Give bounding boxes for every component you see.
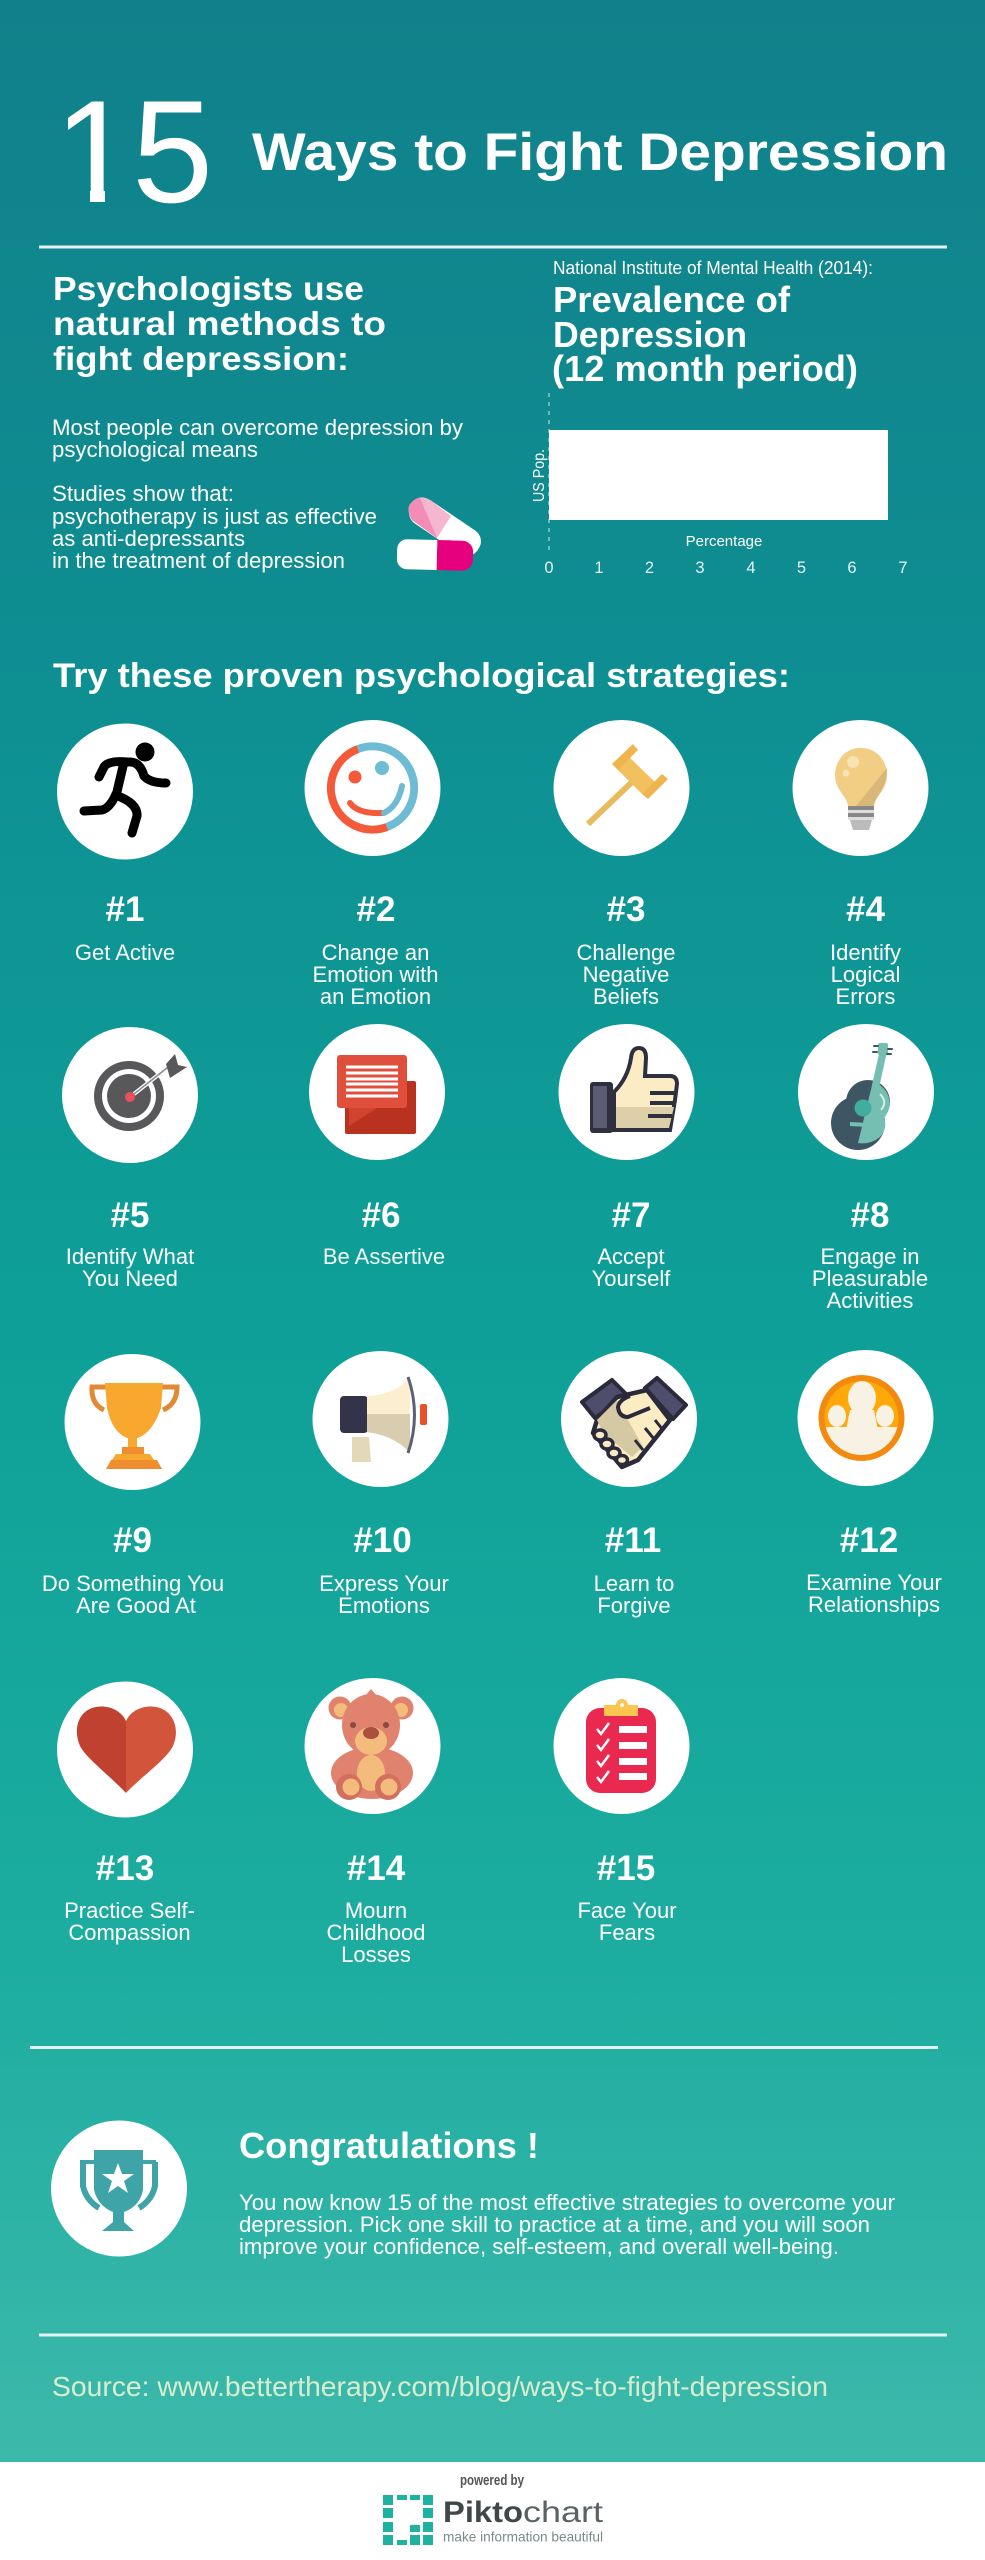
label: Identify bbox=[830, 940, 901, 965]
label: Relationships bbox=[808, 1592, 940, 1617]
wordmark: Pikto bbox=[443, 2496, 523, 2529]
number: #6 bbox=[362, 1196, 400, 1235]
chart heading bbox=[552, 279, 858, 389]
number: #15 bbox=[597, 1849, 655, 1888]
label: Identify What bbox=[66, 1244, 194, 1269]
intro text: psychological means bbox=[52, 437, 258, 462]
wordmark bbox=[443, 2496, 604, 2544]
bar chart: 4 bbox=[746, 559, 756, 577]
chart heading: (12 month period) bbox=[552, 348, 858, 389]
label bbox=[577, 1898, 677, 1945]
intro text: psychotherapy is just as effective bbox=[52, 504, 377, 529]
intro text bbox=[52, 415, 463, 573]
congratulations text: improve your confidence, self-esteem, and overall well-being. bbox=[239, 2234, 839, 2259]
panel: congratulations bbox=[51, 2120, 895, 2259]
bar chart: 0 bbox=[544, 559, 554, 577]
icon: teddy bear bbox=[304, 1678, 440, 1814]
icon: pills bbox=[397, 493, 486, 571]
icon: handshake bbox=[561, 1351, 697, 1487]
strategy 8 bbox=[798, 1024, 934, 1313]
label bbox=[806, 1570, 942, 1617]
label: Losses bbox=[341, 1942, 411, 1967]
strategy 7 bbox=[558, 1024, 694, 1291]
number: #4 bbox=[846, 890, 885, 929]
bar chart: 1 bbox=[594, 559, 604, 577]
label: Face Your bbox=[577, 1898, 677, 1923]
chart heading: Prevalence of bbox=[553, 279, 791, 320]
label: Do Something You bbox=[42, 1571, 224, 1596]
intro heading: natural methods to bbox=[53, 305, 386, 342]
icon: trophy bbox=[64, 1354, 200, 1490]
bar chart: 7 bbox=[898, 559, 908, 577]
label: Negative bbox=[583, 962, 669, 987]
icon: runner bbox=[57, 724, 193, 860]
label: Be Assertive bbox=[323, 1244, 445, 1269]
congratulations text: You now know 15 of the most effective strategies to overcome your bbox=[239, 2190, 895, 2215]
label bbox=[830, 940, 901, 1009]
label: You Need bbox=[82, 1266, 178, 1291]
icon: target bbox=[62, 1027, 198, 1163]
label: Change an bbox=[322, 940, 429, 965]
intro text: Studies show that: bbox=[52, 481, 234, 506]
label: Examine Your bbox=[806, 1570, 942, 1595]
label: Challenge bbox=[576, 940, 676, 965]
congratulations heading: Congratulations ! bbox=[239, 2125, 539, 2166]
label: Activities bbox=[827, 1288, 913, 1313]
label bbox=[594, 1571, 674, 1618]
label: Are Good At bbox=[76, 1593, 196, 1618]
chart heading: Depression bbox=[553, 314, 747, 355]
bar chart: US Pop. bbox=[531, 449, 548, 502]
icon: trophy with star bbox=[51, 2120, 187, 2256]
icon: checklist bbox=[554, 1678, 690, 1814]
icon: light bulb bbox=[792, 720, 928, 856]
bar chart: Percentage bbox=[686, 533, 762, 550]
strategy 15 bbox=[554, 1678, 690, 1945]
icon: megaphone bbox=[312, 1351, 448, 1487]
congratulations text: depression. Pick one skill to practice at a time, and you will soon bbox=[239, 2212, 870, 2237]
label: Forgive bbox=[597, 1593, 671, 1618]
title number 15: 15 bbox=[54, 70, 213, 233]
bar chart: 5 bbox=[797, 559, 806, 577]
title words: Ways to Fight Depression bbox=[252, 123, 948, 182]
powered by: powered by bbox=[460, 2472, 524, 2489]
icon: smile bbox=[304, 720, 440, 856]
label bbox=[812, 1244, 928, 1313]
icon: heart bbox=[57, 1682, 193, 1818]
label bbox=[313, 940, 438, 1009]
congratulations text bbox=[239, 2190, 895, 2259]
bar chart: 6 bbox=[847, 559, 857, 577]
icon: group bbox=[798, 1350, 934, 1486]
panel: psychologists intro bbox=[52, 270, 486, 573]
strategy 2 bbox=[304, 720, 440, 1009]
label: Pleasurable bbox=[812, 1266, 928, 1291]
wordmark: chart bbox=[523, 2496, 604, 2529]
strategy 13 bbox=[57, 1682, 195, 1945]
strategy 4 bbox=[792, 720, 928, 1009]
number: #1 bbox=[106, 890, 144, 929]
label: Beliefs bbox=[593, 984, 659, 1009]
label bbox=[64, 1898, 195, 1945]
number: #9 bbox=[113, 1521, 152, 1560]
label: Emotion with bbox=[313, 962, 438, 987]
icon: thumbs up bbox=[558, 1024, 694, 1160]
number: #13 bbox=[96, 1849, 154, 1888]
label: Practice Self- bbox=[64, 1898, 195, 1923]
wordmark: make information beautiful bbox=[443, 2528, 603, 2544]
label: Accept bbox=[597, 1244, 665, 1269]
intro text: as anti-depressants bbox=[52, 526, 245, 551]
section heading: Try these proven psychological strategies: bbox=[53, 657, 790, 695]
number: #14 bbox=[347, 1849, 406, 1888]
label: Express Your bbox=[319, 1571, 449, 1596]
source: Source: www.bettertherapy.com/blog/ways-to-fight-depression bbox=[52, 2371, 828, 2402]
number: #12 bbox=[840, 1521, 898, 1560]
label: Compassion bbox=[68, 1920, 191, 1945]
number: #8 bbox=[851, 1196, 889, 1235]
strategy 1 bbox=[57, 724, 193, 965]
label bbox=[319, 1571, 449, 1618]
icon: Piktochart logo bbox=[383, 2495, 433, 2545]
number: #10 bbox=[353, 1521, 412, 1560]
strategy 12 bbox=[798, 1350, 942, 1617]
intro heading bbox=[53, 270, 386, 377]
number: #5 bbox=[111, 1196, 149, 1235]
icon: speech bubbles bbox=[309, 1024, 445, 1160]
label: Get Active bbox=[75, 940, 175, 965]
panel: prevalence chart bbox=[531, 258, 908, 577]
label bbox=[326, 1898, 426, 1967]
chart source: National Institute of Mental Health (2014): bbox=[553, 258, 873, 278]
icon: guitar bbox=[798, 1024, 934, 1160]
number: #3 bbox=[607, 890, 645, 929]
title bbox=[54, 70, 948, 233]
number: #11 bbox=[605, 1521, 661, 1560]
number: #7 bbox=[612, 1196, 650, 1235]
label: Learn to bbox=[594, 1571, 674, 1596]
intro heading: fight depression: bbox=[53, 340, 349, 377]
label bbox=[592, 1244, 671, 1291]
intro text: Most people can overcome depression by bbox=[52, 415, 463, 440]
intro text: in the treatment of depression bbox=[52, 548, 345, 573]
label: Engage in bbox=[820, 1244, 920, 1269]
label: Childhood bbox=[326, 1920, 426, 1945]
intro heading: Psychologists use bbox=[53, 270, 364, 307]
label: Yourself bbox=[592, 1266, 671, 1291]
strategy 10 bbox=[312, 1351, 449, 1618]
bar chart: 2 bbox=[645, 559, 654, 577]
label bbox=[576, 940, 676, 1009]
icon: gavel bbox=[554, 720, 690, 856]
strategy 5 bbox=[62, 1027, 198, 1291]
strategy 11 bbox=[561, 1351, 697, 1618]
strategy 3 bbox=[554, 720, 690, 1009]
strategy 14 bbox=[304, 1678, 440, 1967]
panel: footer bbox=[0, 2462, 985, 2560]
bar chart bbox=[531, 393, 908, 577]
strategy 9 bbox=[42, 1354, 224, 1618]
label: Mourn bbox=[345, 1898, 407, 1923]
label: Logical bbox=[831, 962, 900, 987]
label: Errors bbox=[836, 984, 895, 1009]
bar chart: 3 bbox=[695, 559, 705, 577]
label: Fears bbox=[599, 1920, 655, 1945]
strategy 6 bbox=[309, 1024, 445, 1269]
label bbox=[66, 1244, 194, 1291]
label: an Emotion bbox=[320, 984, 431, 1009]
label: Emotions bbox=[338, 1593, 430, 1618]
label bbox=[42, 1571, 224, 1618]
number: #2 bbox=[357, 890, 395, 929]
